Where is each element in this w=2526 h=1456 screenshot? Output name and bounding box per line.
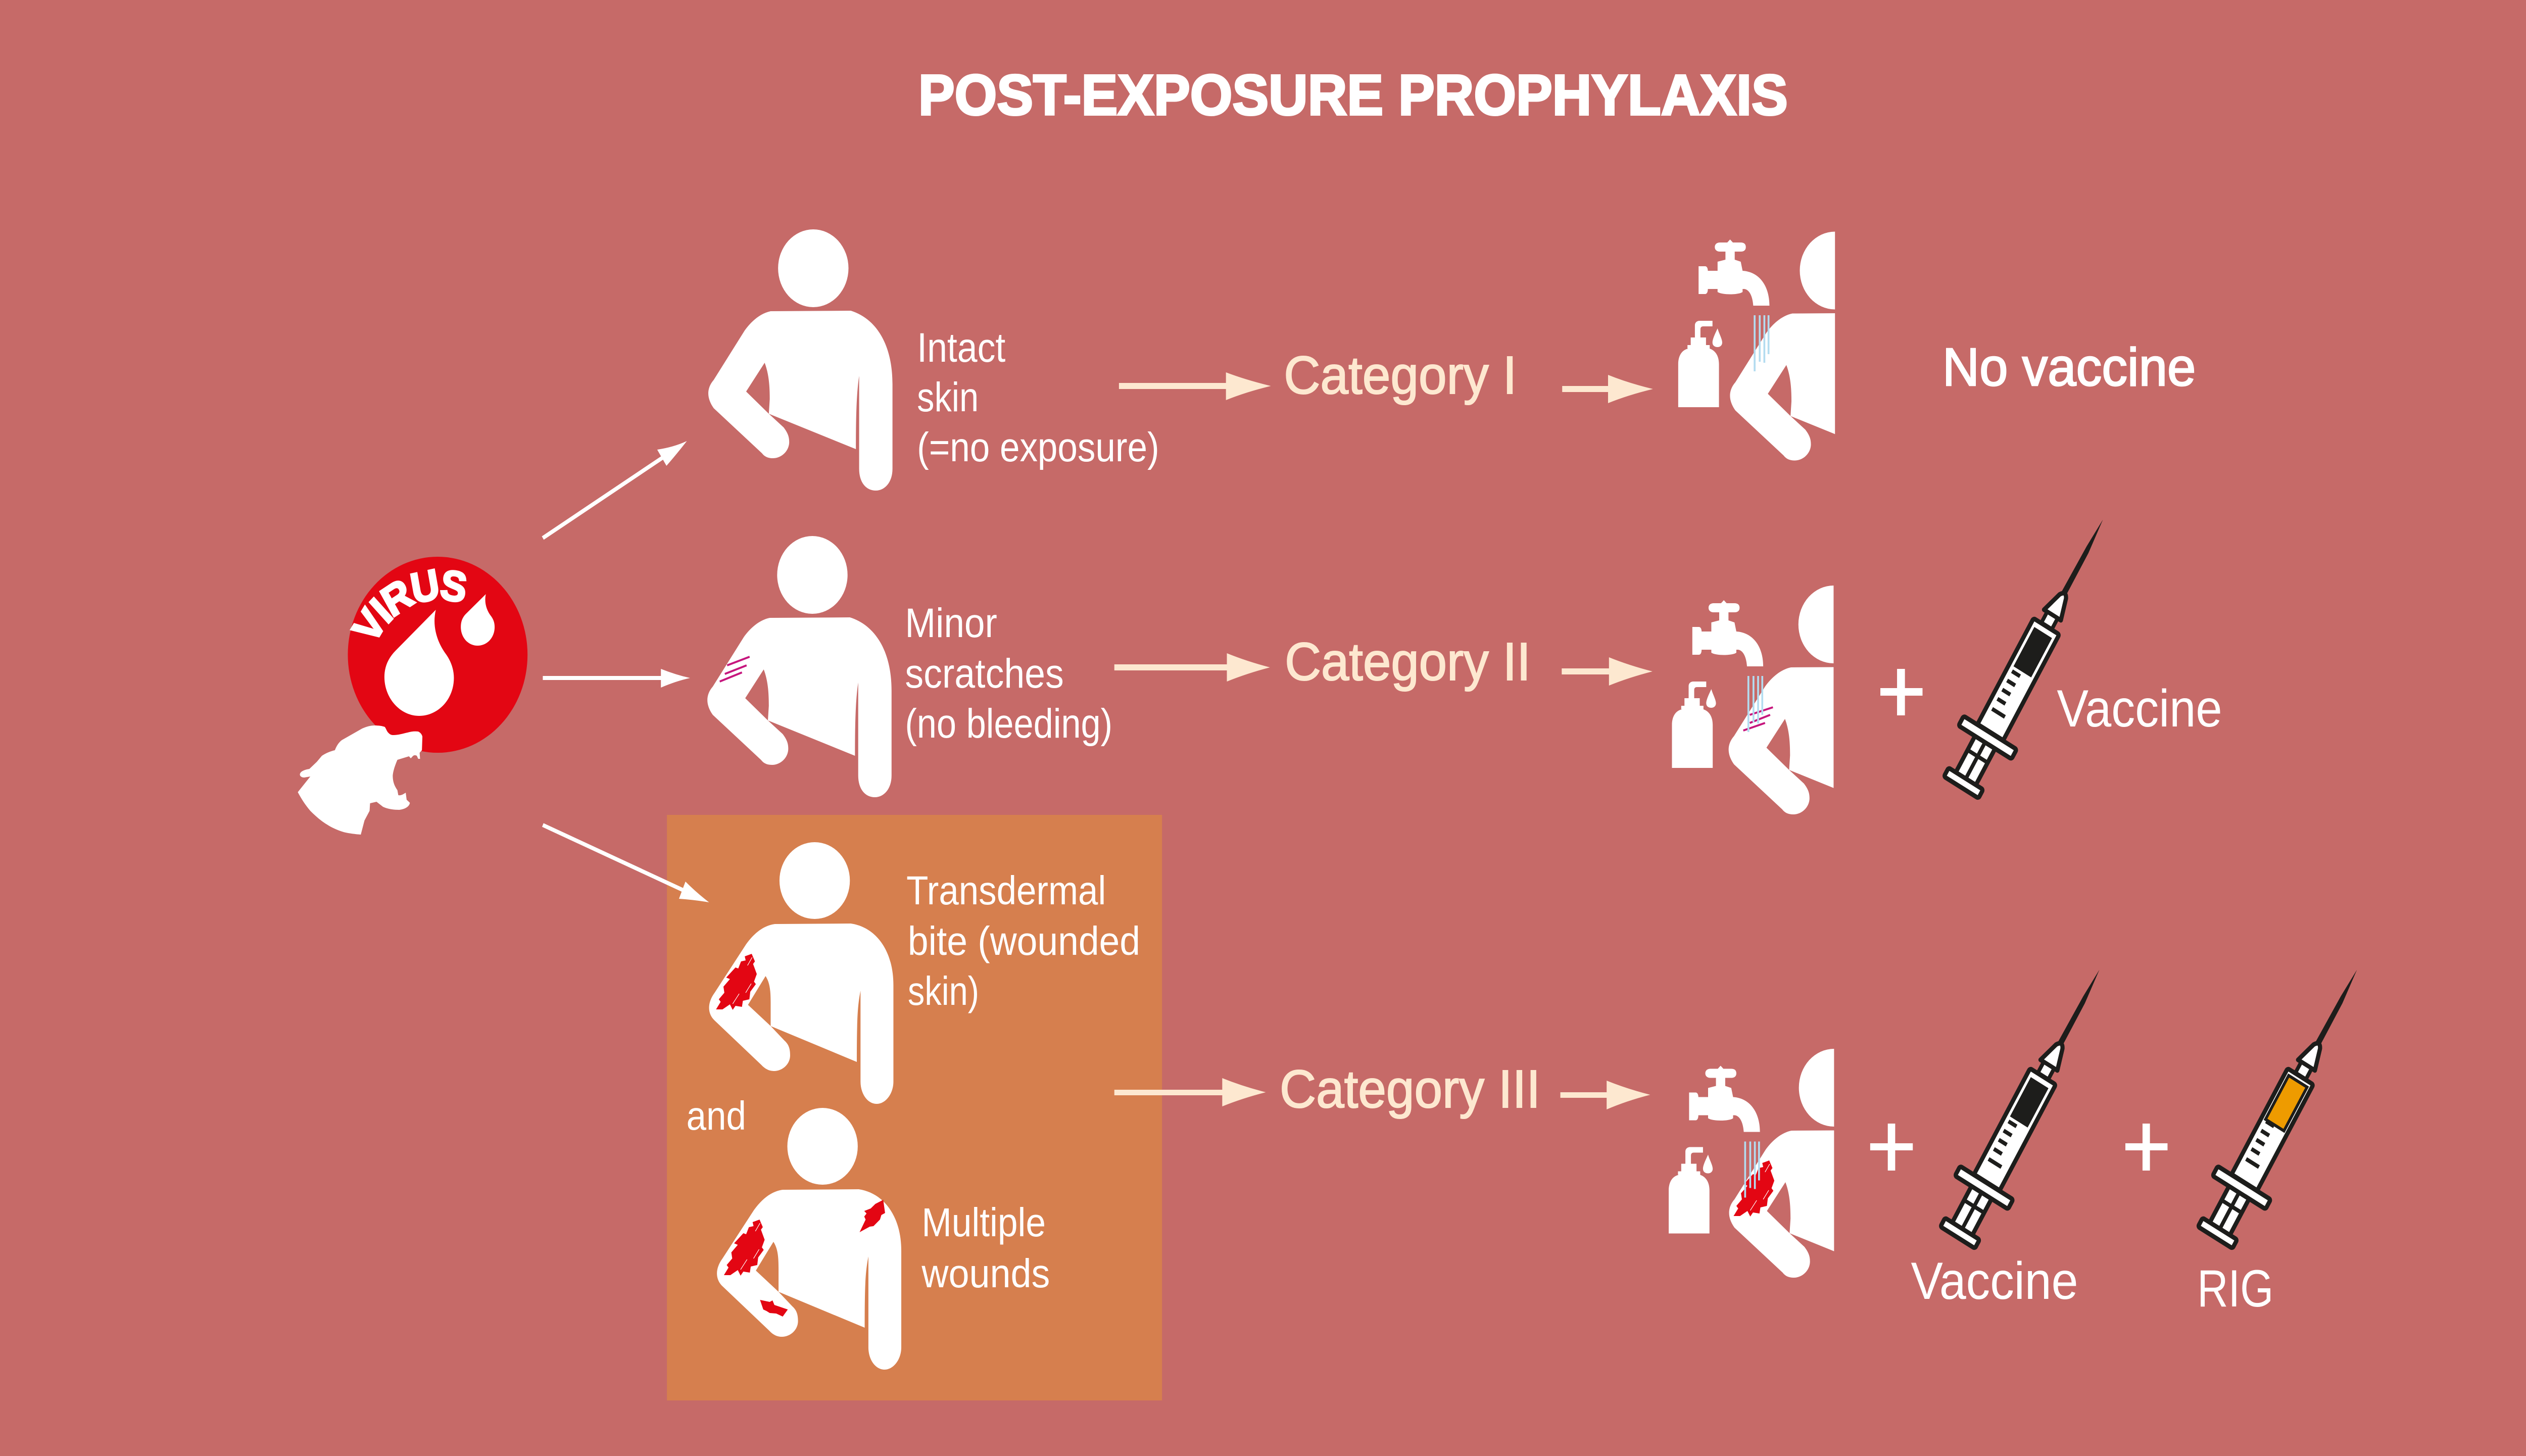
label: multiple wounds: Multiple xyxy=(921,1200,1046,1245)
heading: category I: Category I xyxy=(1284,345,1517,405)
icon: virus source (red circle, drops and animal head): VIRUS xyxy=(350,568,467,638)
icon: plus, category II xyxy=(1880,669,1922,715)
label: vaccine, category III: Vaccine xyxy=(1911,1252,2078,1311)
icon: person with minor scratches xyxy=(707,536,892,797)
heading: category III: Category III xyxy=(1280,1059,1540,1119)
label: minor scratches: scratches xyxy=(905,650,1064,697)
label: intact skin: (=no exposure) xyxy=(917,424,1159,470)
label: transdermal bite xyxy=(906,868,1140,1014)
label: intact skin: skin xyxy=(917,374,979,420)
icon: half person being washed, category I xyxy=(1730,231,1835,461)
label: intact skin: Intact xyxy=(917,324,1005,371)
label: transdermal bite: bite (wounded xyxy=(908,919,1140,964)
arrow: virus to intact skin xyxy=(543,441,687,538)
label: minor scratches: Minor xyxy=(905,600,997,646)
label: minor scratches: (no bleeding) xyxy=(905,700,1112,747)
arrow: virus to minor scratches xyxy=(543,669,690,688)
icon: wash, faucet and soap, category III xyxy=(1669,1066,1760,1234)
red virus circle xyxy=(348,557,527,753)
label: intact skin xyxy=(917,324,1159,470)
arrow: intact skin to category I xyxy=(1119,372,1271,400)
icon: half person being washed with wound, category III xyxy=(1729,1049,1834,1278)
icon: water stream, category I xyxy=(1755,315,1769,371)
icon: virus source (red circle, drops and animal head) xyxy=(298,557,527,835)
panel: category III exposure highlight xyxy=(667,815,1162,1400)
icon: syringe, vaccine, category II xyxy=(1935,503,2129,804)
icon: person with multiple wounds xyxy=(717,1108,901,1370)
arrow: wounds to category III xyxy=(1114,1078,1266,1106)
large blood drop xyxy=(384,610,454,716)
arrow: category II to washing xyxy=(1562,657,1653,686)
label: multiple wounds xyxy=(921,1200,1050,1296)
heading: category II: Category II xyxy=(1285,632,1531,692)
arrow: minor scratches to category II xyxy=(1114,653,1270,682)
label: multiple wounds: wounds xyxy=(921,1251,1050,1296)
icon: person with transdermal bite xyxy=(709,842,893,1104)
label: and: and xyxy=(687,1094,746,1139)
icon: syringe, vaccine, category III xyxy=(1931,953,2126,1254)
virus label on arc xyxy=(374,600,470,646)
icon: plus before vaccine, category III xyxy=(1870,1124,1913,1171)
icon: person with intact skin xyxy=(708,229,893,491)
icon: water stream, category II xyxy=(1748,676,1762,732)
label: minor scratches xyxy=(905,600,1112,747)
label: vaccine, category II: Vaccine xyxy=(2057,680,2222,738)
icon: wash, faucet and soap, category I xyxy=(1678,239,1769,407)
icon: syringe, RIG xyxy=(2189,953,2384,1254)
small blood drop xyxy=(461,594,495,646)
label: RIG: RIG xyxy=(2197,1259,2273,1318)
label: transdermal bite: skin) xyxy=(908,969,979,1014)
label: no vaccine: No vaccine xyxy=(1942,337,2196,397)
title: POST-EXPOSURE PROPHYLAXIS xyxy=(918,63,1788,127)
arrow: category I to washing xyxy=(1562,375,1653,403)
icon: water stream, category III xyxy=(1745,1142,1759,1197)
label: transdermal bite: Transdermal xyxy=(906,868,1106,913)
icon: plus before RIG xyxy=(2125,1124,2167,1171)
icon: half person being washed, category II xyxy=(1729,586,1834,814)
icon: wash, faucet and soap, category II xyxy=(1672,600,1763,768)
arrow: category III to washing xyxy=(1561,1081,1650,1109)
arrow: virus to transdermal bite xyxy=(543,825,709,902)
animal head silhouette xyxy=(298,725,422,835)
